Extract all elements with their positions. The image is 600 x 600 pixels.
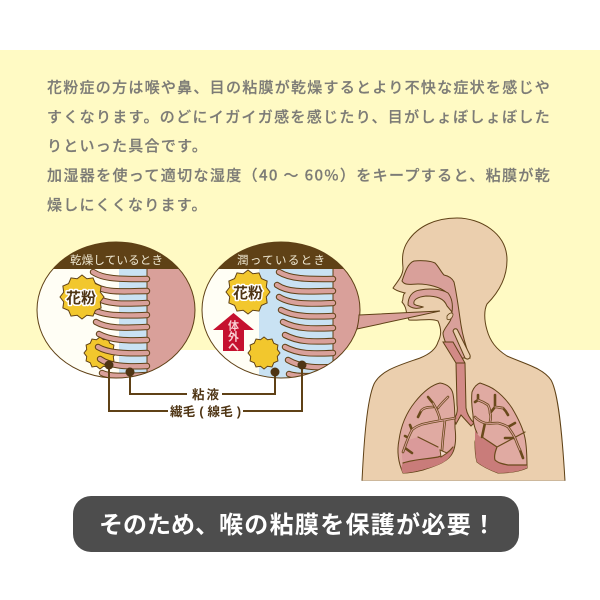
circle fill: [202, 242, 360, 378]
red outward arrow: 体: [228, 318, 239, 332]
yellow background panel: [0, 50, 600, 350]
circle: moist state: [195, 238, 365, 380]
large pollen: [226, 270, 270, 314]
right lung dark lower lobe: [475, 430, 527, 473]
right lung bronchi: [475, 395, 523, 458]
body text: すくなります。のどにイガイガ感を感じたり、目がしょぼしょぼした: [47, 106, 551, 127]
header band: [218, 242, 344, 269]
bottom banner: そのため、: [99, 512, 219, 539]
body text: 燥しにくくなります。: [47, 194, 208, 215]
label: cilia: 繊毛 ( 線毛 ): [170, 404, 241, 419]
leader lines: mucus: [126, 368, 280, 394]
header text: 潤っているとき: [237, 254, 325, 267]
header band: [54, 242, 178, 269]
left lung small bronchus end: [440, 450, 447, 457]
trachea and bronchi: [443, 342, 474, 426]
body text: 加湿器を使って適切な湿度（40 ～ 60%）をキープすると、粘膜が乾: [47, 164, 551, 186]
body silhouette: [362, 218, 565, 481]
left lung bronchi: [403, 397, 455, 453]
esophagus tube: [453, 329, 470, 359]
callout wedge linking throat to circle: [357, 311, 440, 329]
small pollen: [248, 337, 280, 369]
red outward arrow: 外: [228, 330, 239, 344]
body text: [47, 76, 551, 215]
pollen label: 花粉: [233, 284, 263, 302]
soft palate arch: [408, 289, 452, 312]
red outward arrow: へ: [228, 342, 239, 354]
left lung lobe lines: [403, 437, 453, 463]
right lung lobe lines: [482, 432, 527, 465]
small pollen: [84, 337, 116, 369]
header text: 乾燥しているとき: [70, 254, 163, 267]
circle fill: [37, 242, 195, 378]
red outward arrow: [213, 313, 254, 354]
circle outline: [202, 242, 360, 378]
bottom banner: [73, 496, 519, 552]
body text: 花粉症の方は喉や鼻、目の粘膜が乾燥するとより不快な症状を感じや: [47, 76, 551, 98]
human body cross-section: [361, 218, 566, 482]
large pollen: [60, 275, 104, 319]
label: mucus: 粘液: [192, 387, 219, 402]
left lung shaded lobe: [402, 437, 440, 463]
circle outline: [37, 242, 195, 378]
cilia ribs: [277, 272, 333, 376]
body text: りといった具合です。: [47, 135, 208, 156]
leader lines: cilia: [104, 360, 306, 411]
left lung dark lower lobe: [402, 447, 454, 473]
bottom banner: 喉の粘膜を保護が必要！: [219, 511, 496, 539]
left lung: [398, 383, 456, 473]
right lung: [472, 383, 527, 473]
epiglottis: [447, 313, 453, 320]
cilia ribs: [92, 272, 147, 376]
pollen label: 花粉: [66, 289, 96, 307]
nasal cavity and pharynx: [402, 261, 470, 358]
circle: dry state: [30, 238, 200, 380]
